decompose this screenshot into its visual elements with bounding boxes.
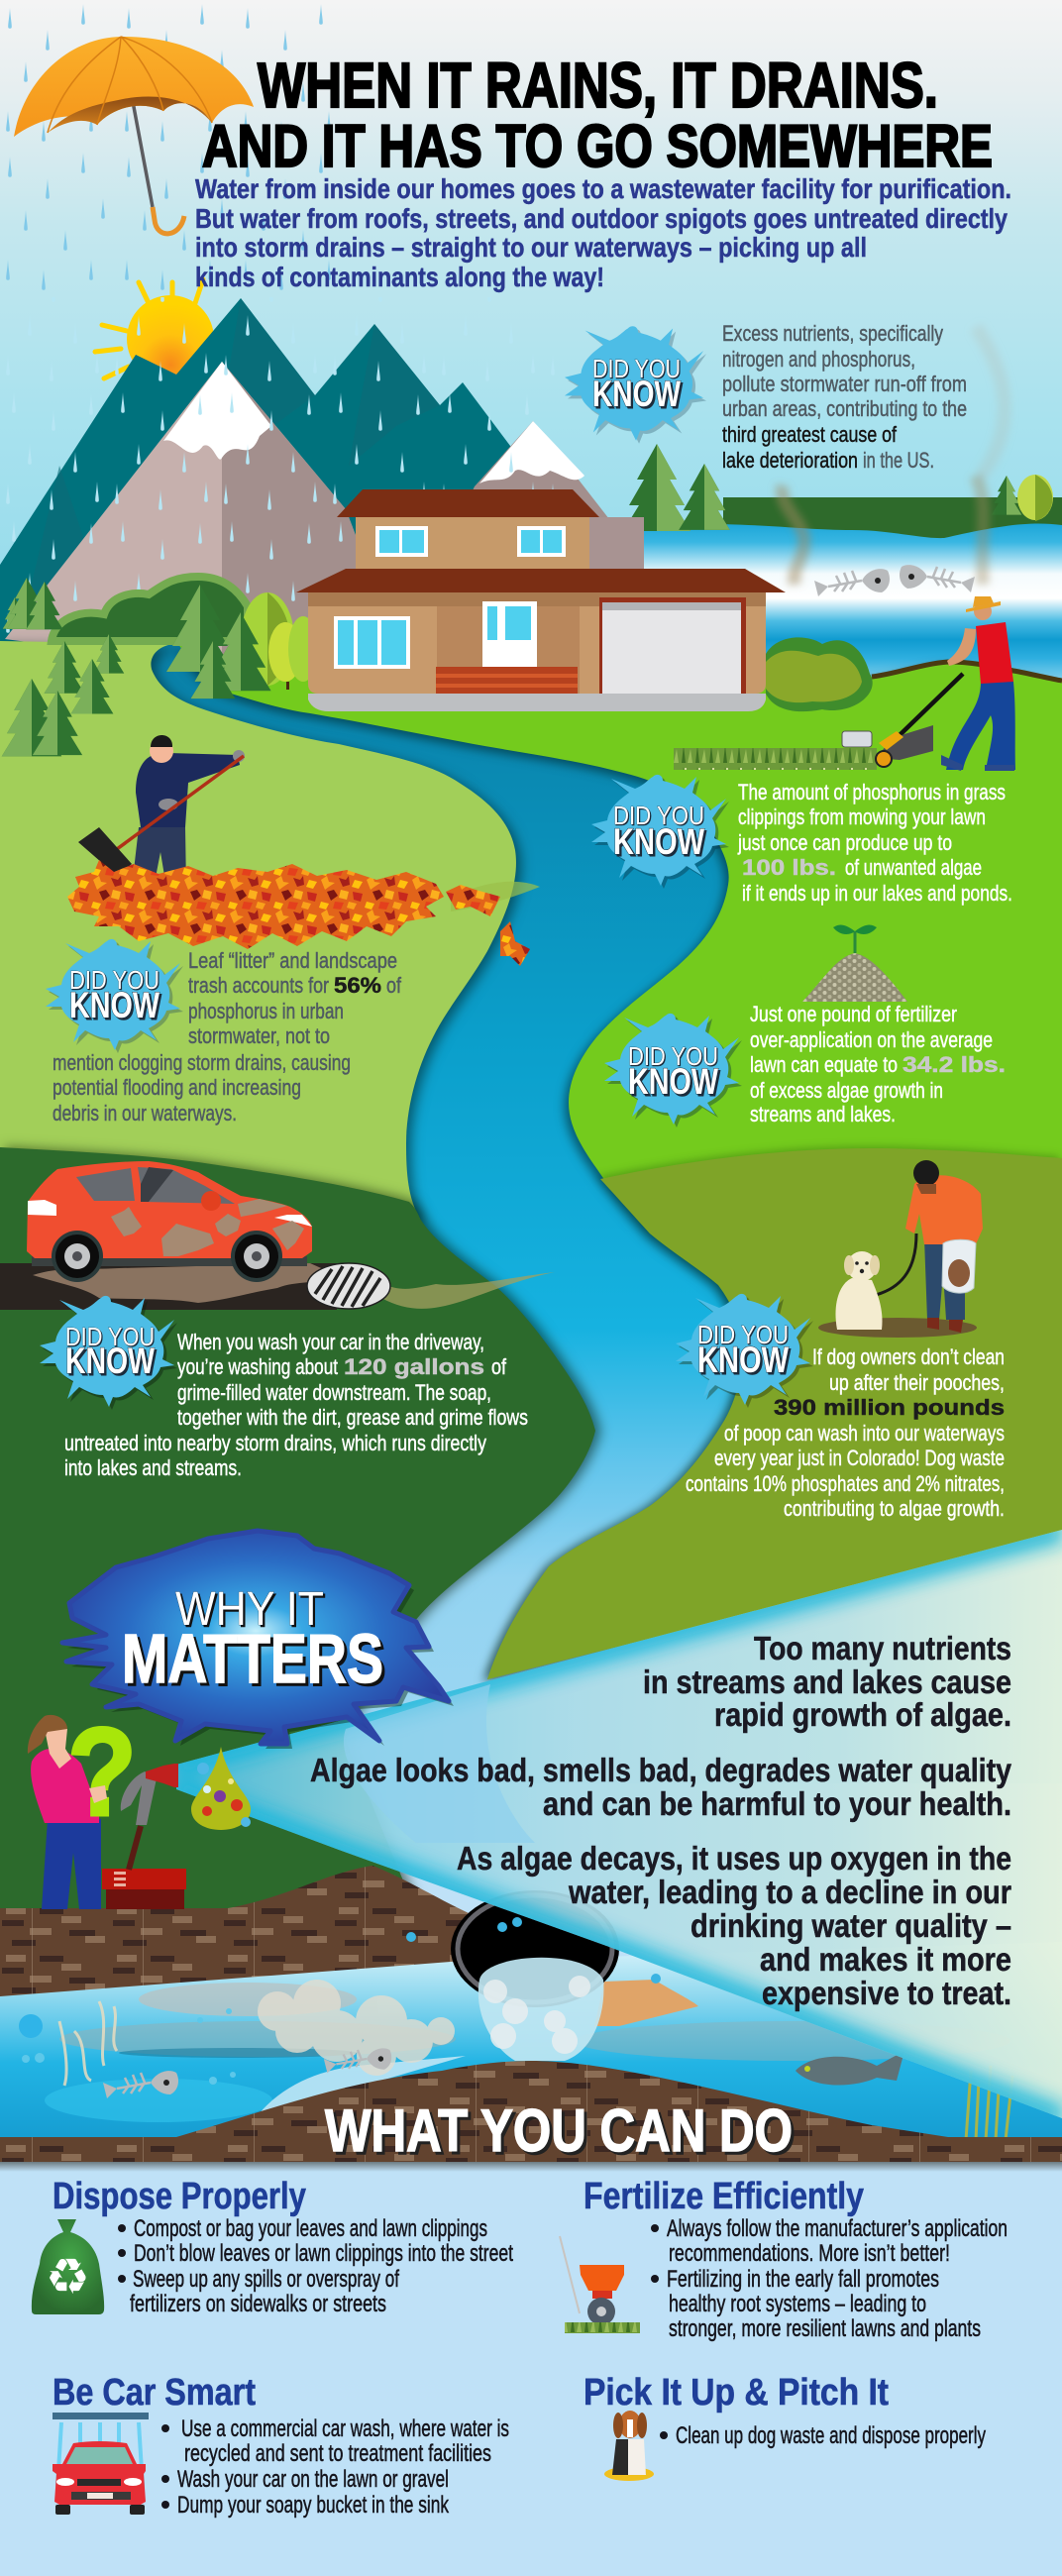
leaf raking man [78, 735, 245, 888]
fact text: fertilizer: streams and lakes. [750, 1102, 896, 1127]
heading: fertilize efficiently: Fertilize Efficiently [584, 2176, 864, 2217]
rain over sky [0, 0, 337, 297]
list: fertilize efficiently: healthy root systems – leading to [669, 2291, 926, 2317]
list: dispose properly [118, 2215, 513, 2317]
fact text: lake deterioration: urban areas, contributing to the [722, 396, 967, 421]
fact text: car wash: you’re washing about [177, 1354, 338, 1379]
fact text: car wash: together with the dirt, grease and grime flows [177, 1405, 528, 1430]
list: fertilize efficiently [651, 2215, 1008, 2342]
soil lower layer [0, 2061, 1062, 2162]
list: fertilize efficiently: Fertilizing in the early fall promotes [667, 2266, 939, 2293]
did you know: grass clippings: KNOW [613, 821, 704, 862]
why it matters text: Too many nutrients [754, 1630, 1011, 1666]
muddy puddle under car [33, 1263, 337, 1303]
title [202, 50, 993, 179]
fact text: fertilizer: Just one pound of fertilizer [750, 1002, 957, 1026]
fact text: dog waste [686, 1344, 1005, 1521]
hedge beside house [766, 637, 873, 711]
woman's hand on question mark [89, 1785, 107, 1803]
did you know: fertilizer: KNOW [628, 1061, 718, 1102]
algae water drop [191, 1747, 251, 1830]
dirty car [27, 1161, 312, 1282]
did you know: fertilizer [604, 1014, 742, 1127]
house [296, 489, 786, 711]
did you know: lake deterioration: DID YOU [592, 354, 681, 383]
mountains: teal range [0, 298, 555, 713]
did you know: fertilizer: DID YOU [628, 1041, 718, 1071]
did you know: leaf litter: KNOW [69, 985, 159, 1025]
did you know: dog waste: KNOW [697, 1340, 789, 1380]
list: be car smart: Use a commercial car wash, where water is [181, 2415, 509, 2442]
did you know: car wash [40, 1296, 177, 1410]
hedge behind river head [52, 577, 248, 641]
icon: fertilizer spreader [560, 2236, 640, 2333]
dead fish and algae smoke [782, 327, 1005, 596]
intro text: kinds of contaminants along the way! [195, 262, 604, 292]
fact text: fertilizer: of excess algae growth in [750, 1078, 943, 1103]
why it matters text: and makes it more [760, 1941, 1011, 1978]
fact text: car wash: into lakes and streams. [64, 1455, 242, 1480]
heading: pick it up and pitch it: Pick It Up & Pitch It [584, 2372, 889, 2414]
what you can do heading: WHAT YOU CAN DO [325, 2097, 793, 2164]
why it matters splat: WHY IT [175, 1583, 324, 1636]
did you know: car wash: KNOW [65, 1341, 155, 1381]
list: dispose properly: Don’t blow leaves or lawn clippings into the street [134, 2240, 513, 2267]
fact text: lake deterioration: nitrogen and phosphorus, [722, 347, 915, 372]
did you know: car wash: DID YOU [65, 1322, 155, 1351]
fact text: car wash: 120 gallons [344, 1354, 484, 1379]
heading: dispose properly: Dispose Properly [53, 2176, 306, 2217]
sewage clouds [258, 1980, 455, 2076]
ground: dark green lower left [0, 1147, 595, 1912]
fact text: lake deterioration [722, 321, 967, 473]
fact text: lake deterioration: lake deterioration [722, 448, 858, 473]
icon: car wash [53, 2413, 149, 2515]
why it matters text [310, 1630, 1012, 2011]
icon: trash bag with recycle symbol: ♻ [46, 2248, 90, 2306]
fact text: car wash: When you wash your car in the driveway, [177, 1330, 484, 1354]
fallen leaves pile [67, 860, 540, 966]
list: be car smart: Wash your car on the lawn or gravel [177, 2466, 449, 2493]
did you know: lake deterioration [565, 326, 706, 444]
why it matters text: in streams and lakes cause [643, 1664, 1011, 1700]
lawn mower man [899, 596, 1015, 771]
fact text: car wash [64, 1330, 528, 1480]
why it matters text: rapid growth of algae. [714, 1696, 1011, 1733]
fact text: lake deterioration: pollute stormwater run-off from [722, 372, 967, 396]
fact text: leaf litter: stormwater, not to [188, 1023, 330, 1048]
fact text: leaf litter: phosphorus in urban [188, 999, 344, 1023]
hose nozzle and toolbox [102, 1764, 186, 1909]
trees across the lake [623, 444, 1053, 531]
fact text: car wash: grime-filled water downstream. The soap, [177, 1380, 491, 1405]
why it matters text: and can be harmful to your health. [543, 1785, 1011, 1822]
fact text: lake deterioration: in the US. [863, 448, 934, 473]
fact text: car wash: of [491, 1354, 507, 1379]
umbrella [14, 37, 254, 234]
why it matters text: expensive to treat. [762, 1975, 1011, 2011]
question mark: ? [67, 1702, 137, 1842]
list: dispose properly: Compost or bag your leaves and lawn clippings [134, 2215, 487, 2242]
ground: olive right hill [487, 1148, 1062, 1679]
fact text: leaf litter: debris in our waterways. [53, 1101, 237, 1126]
fact text: grass clippings: 100 lbs. [742, 855, 836, 880]
fact text: leaf litter: potential flooding and increasing [53, 1075, 301, 1100]
did you know: lake deterioration: KNOW [592, 374, 681, 414]
list: be car smart: recycled and sent to treatment facilities [184, 2440, 491, 2467]
intro text: into storm drains – straight to our waterways – picking up all [195, 232, 867, 263]
dead fish and live fish in water [19, 2001, 1012, 2140]
sun [95, 279, 214, 382]
fact text: dog waste: up after their pooches, [829, 1370, 1005, 1395]
did you know: dog waste [676, 1294, 813, 1408]
fact text: fertilizer [750, 1002, 1006, 1127]
list: be car smart [161, 2415, 509, 2519]
icon: beagle [604, 2411, 654, 2481]
house windows [334, 526, 566, 669]
mountain: gray snow peak [5, 362, 416, 694]
did you know: leaf litter: DID YOU [69, 965, 159, 995]
fact text: lake deterioration: third greatest cause of [722, 422, 898, 447]
fact text: lake deterioration: Excess nutrients, specifically [722, 321, 943, 346]
fact text: leaf litter: of [386, 973, 402, 998]
lake and far shore [594, 497, 1062, 711]
fact text: fertilizer: lawn can equate to [750, 1052, 898, 1077]
did you know: leaf litter [46, 939, 183, 1053]
did you know: grass clippings: DID YOU [613, 801, 704, 830]
why it matters splat: MATTERS [122, 1620, 383, 1697]
heading: be car smart: Be Car Smart [53, 2372, 256, 2414]
list: be car smart: Dump your soapy bucket in the sink [177, 2492, 450, 2519]
fertilizer pile with sprout [802, 925, 907, 1002]
fact text: grass clippings: of unwanted algae [845, 855, 982, 880]
white dog [835, 1251, 883, 1330]
rain over mountains [0, 297, 555, 674]
fact text: leaf litter [53, 948, 402, 1126]
icon: trash bag with recycle symbol [32, 2219, 104, 2314]
bottom action panel background [0, 2162, 1062, 2576]
sky background [0, 0, 1062, 753]
fact text: grass clippings [737, 780, 1012, 906]
hillside trees [2, 578, 318, 756]
fact text: grass clippings: just once can produce up to [737, 830, 952, 855]
ground: bright green right bank [178, 644, 1062, 1679]
list: fertilize efficiently: recommendations. More isn’t better! [669, 2240, 950, 2267]
why it matters text: water, leading to a decline in our [568, 1874, 1011, 1910]
fact text: car wash: untreated into nearby storm drains, which runs directly [64, 1431, 486, 1455]
list: dispose properly: fertilizers on sidewalks or streets [130, 2291, 386, 2317]
why it matters splat [62, 1531, 454, 1749]
fact text: leaf litter: 56% [334, 973, 381, 998]
fact text: leaf litter: trash accounts for [188, 973, 329, 998]
storm drain with dirty runoff [307, 1263, 555, 1309]
fact text: dog waste: 390 million pounds [774, 1395, 1005, 1420]
fact text: fertilizer: 34.2 lbs. [903, 1052, 1006, 1077]
why it matters text: drinking water quality – [690, 1907, 1011, 1944]
river visible through beam [344, 1684, 535, 1843]
treatment beam spray [176, 1530, 1062, 2118]
storm pipe with gush [406, 1890, 698, 2061]
fact text: grass clippings: clippings from mowing your lawn [738, 805, 986, 829]
road [0, 1263, 337, 1310]
fact text: leaf litter: Leaf “litter” and landscape [188, 948, 397, 973]
list: dispose properly: Sweep up any spills or overspray of [133, 2266, 399, 2293]
underground water [0, 1942, 1062, 2162]
did you know: grass clippings [591, 775, 729, 889]
fact text: leaf litter: mention clogging storm drains, causing [53, 1050, 351, 1075]
ground: light green left bank [0, 641, 516, 1219]
shoreline strip [872, 662, 1062, 681]
river [144, 644, 1062, 1783]
fact text: dog waste: If dog owners don’t clean [812, 1344, 1005, 1369]
lawn mower and grass strip [674, 725, 933, 770]
mountain: small right peak [436, 421, 644, 565]
did you know: dog waste: DID YOU [697, 1320, 789, 1349]
soil upper layer [0, 1866, 634, 2021]
intro text [195, 173, 1011, 292]
person walking dog [818, 1160, 983, 1338]
fact text: dog waste: contributing to algae growth. [784, 1496, 1005, 1521]
fact text: fertilizer: over-application on the average [750, 1027, 993, 1052]
woman with question mark [28, 1702, 137, 1909]
